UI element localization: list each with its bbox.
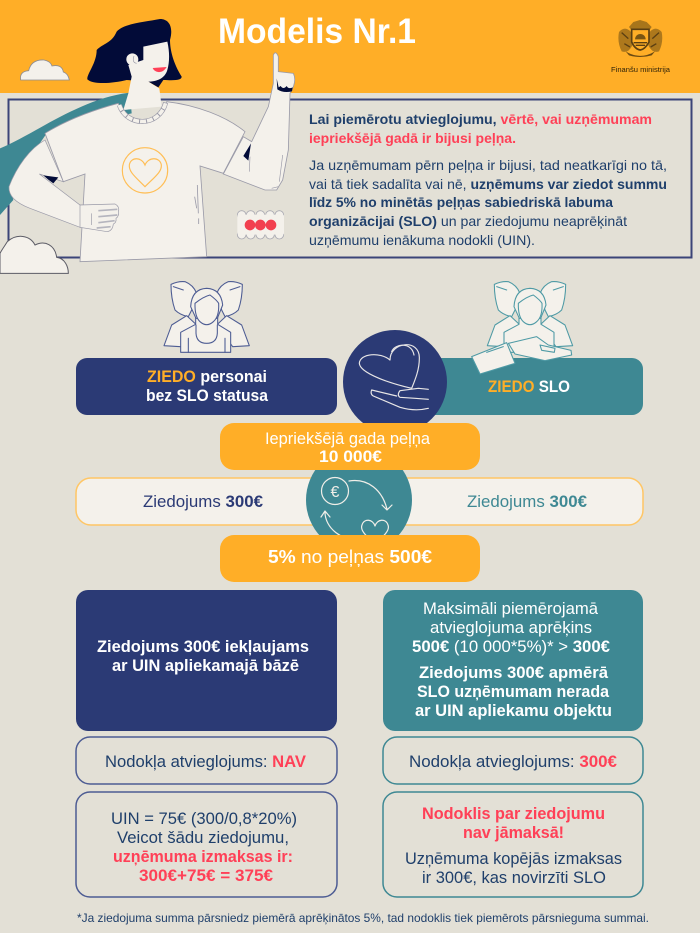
panel: right header [390, 358, 643, 415]
heading: intro [309, 111, 652, 146]
logo: Finanšu ministrija: Finanšu ministrija [611, 65, 671, 74]
illustration: woman with cape [0, 19, 295, 273]
neck and face [123, 42, 169, 110]
arms [9, 140, 100, 230]
panel: right header: ZIEDO SLO [488, 378, 570, 396]
icon: heart in hand [343, 330, 447, 434]
footnote: *Ja ziedojuma summa pārsniedz piemērā aprēķinātos 5%, tad nodoklis tiek piemērots pārsnieguma summai. [77, 911, 649, 925]
logo: Finanšu ministrija [611, 20, 671, 74]
panel: right result: 500€ (10 000*5%)* > 300€ [412, 638, 610, 656]
panel: right result: Maksimāli piemērojamā [423, 600, 599, 618]
panel: right donation pill [373, 478, 643, 525]
heading: intro: iepriekšējā gadā ir bijusi peļņa. [309, 130, 516, 146]
panel: right costs: Uzņēmuma kopējās izmaksas [405, 849, 622, 868]
panel: right costs: nav jāmaksā! [463, 823, 564, 842]
panel: left costs: uzņēmuma izmaksas ir: [113, 847, 293, 866]
panel: right costs [383, 792, 643, 897]
panel: left costs: 300€+75€ = 375€ [139, 866, 274, 885]
underarm shadows [43, 78, 293, 193]
panel: right tax relief: Nodokļa atvieglojums: 300€ [409, 752, 618, 771]
panel: right donation pill: Ziedojums 300€ [467, 493, 587, 511]
panel: right result: ar UIN apliekamu objektu [415, 702, 612, 720]
panel: previous year profit: 10 000€ [319, 448, 382, 466]
text block: intro paragraph: vai tā tiek sadalīta vai nē, uzņēmums var ziedot summu [309, 176, 667, 192]
panel: left tax relief: Nodokļa atvieglojums: NAV [105, 752, 307, 771]
panel: left result: ar UIN apliekamajā bāzē [112, 657, 299, 675]
icon: pill card [237, 211, 284, 239]
panel: left donation pill [76, 478, 346, 525]
panel: right costs: Nodoklis par ziedojumu [422, 804, 605, 823]
panel: previous year profit: Iepriekšējā gada peļņa [265, 430, 431, 448]
hand [80, 204, 119, 232]
panel: right result: atvieglojuma aprēķins [430, 619, 592, 637]
shirt heart badge [122, 148, 168, 193]
text block: intro paragraph: uzņēmumu ienākuma nodokli (UIN). [309, 232, 535, 248]
panel: left header [76, 358, 337, 415]
panel: right result: SLO uzņēmumam nerada [417, 683, 610, 701]
cape [0, 93, 132, 215]
panel: left costs: UIN = 75€ (300/0,8*20%) [111, 809, 297, 828]
panel: 5 percent of profit: 5% no peļņas 500€ [268, 546, 432, 567]
panel: right result: Ziedojums 300€ apmērā [419, 664, 609, 682]
panel: previous year profit [220, 423, 480, 470]
text block: intro paragraph [309, 157, 667, 248]
t-shirt [45, 102, 245, 262]
icon: people navy [164, 282, 249, 352]
text block: intro paragraph: līdz 5% no minētās peļņas sabiedriskā labuma [309, 194, 613, 210]
icon: big cloud [0, 236, 68, 273]
panel: left header: bez SLO statusa [146, 387, 269, 405]
panel: left tax relief [76, 737, 337, 784]
collar [119, 103, 166, 121]
icon: exchange circle: € [331, 484, 340, 501]
panel: intro box [8, 100, 692, 258]
panel: right result [383, 590, 643, 731]
header band [0, 0, 700, 93]
panel: 5 percent of profit [220, 535, 480, 582]
ear [126, 53, 138, 65]
panel: left costs: Veicot šādu ziedojumu, [117, 828, 289, 847]
hair [87, 19, 182, 87]
panel: left header: ZIEDO personai [147, 368, 267, 386]
panel: left costs [76, 792, 337, 897]
panel: left result [76, 590, 337, 731]
panel: left donation pill: Ziedojums 300€ [143, 493, 263, 511]
title: Modelis Nr.1 [218, 12, 416, 51]
panel: right costs: ir 300€, kas novirzīti SLO [422, 868, 606, 887]
mouth [153, 67, 167, 72]
icon: small cloud [20, 60, 69, 80]
text block: intro paragraph: organizācijai (SLO) un par ziedojumu neaprēķināt [309, 213, 627, 229]
panel: left result: Ziedojums 300€ iekļaujams [97, 638, 309, 656]
text block: intro paragraph: Ja uzņēmumam pērn peļņa ir bijusi, tad neatkarīgi no tā, [309, 157, 667, 173]
heading: intro: Lai piemērotu atvieglojumu, vērtē, vai uzņēmumam [309, 111, 652, 127]
icon: exchange circle [306, 447, 412, 553]
panel: right tax relief [383, 737, 643, 784]
icon: people and hand teal [472, 282, 573, 374]
